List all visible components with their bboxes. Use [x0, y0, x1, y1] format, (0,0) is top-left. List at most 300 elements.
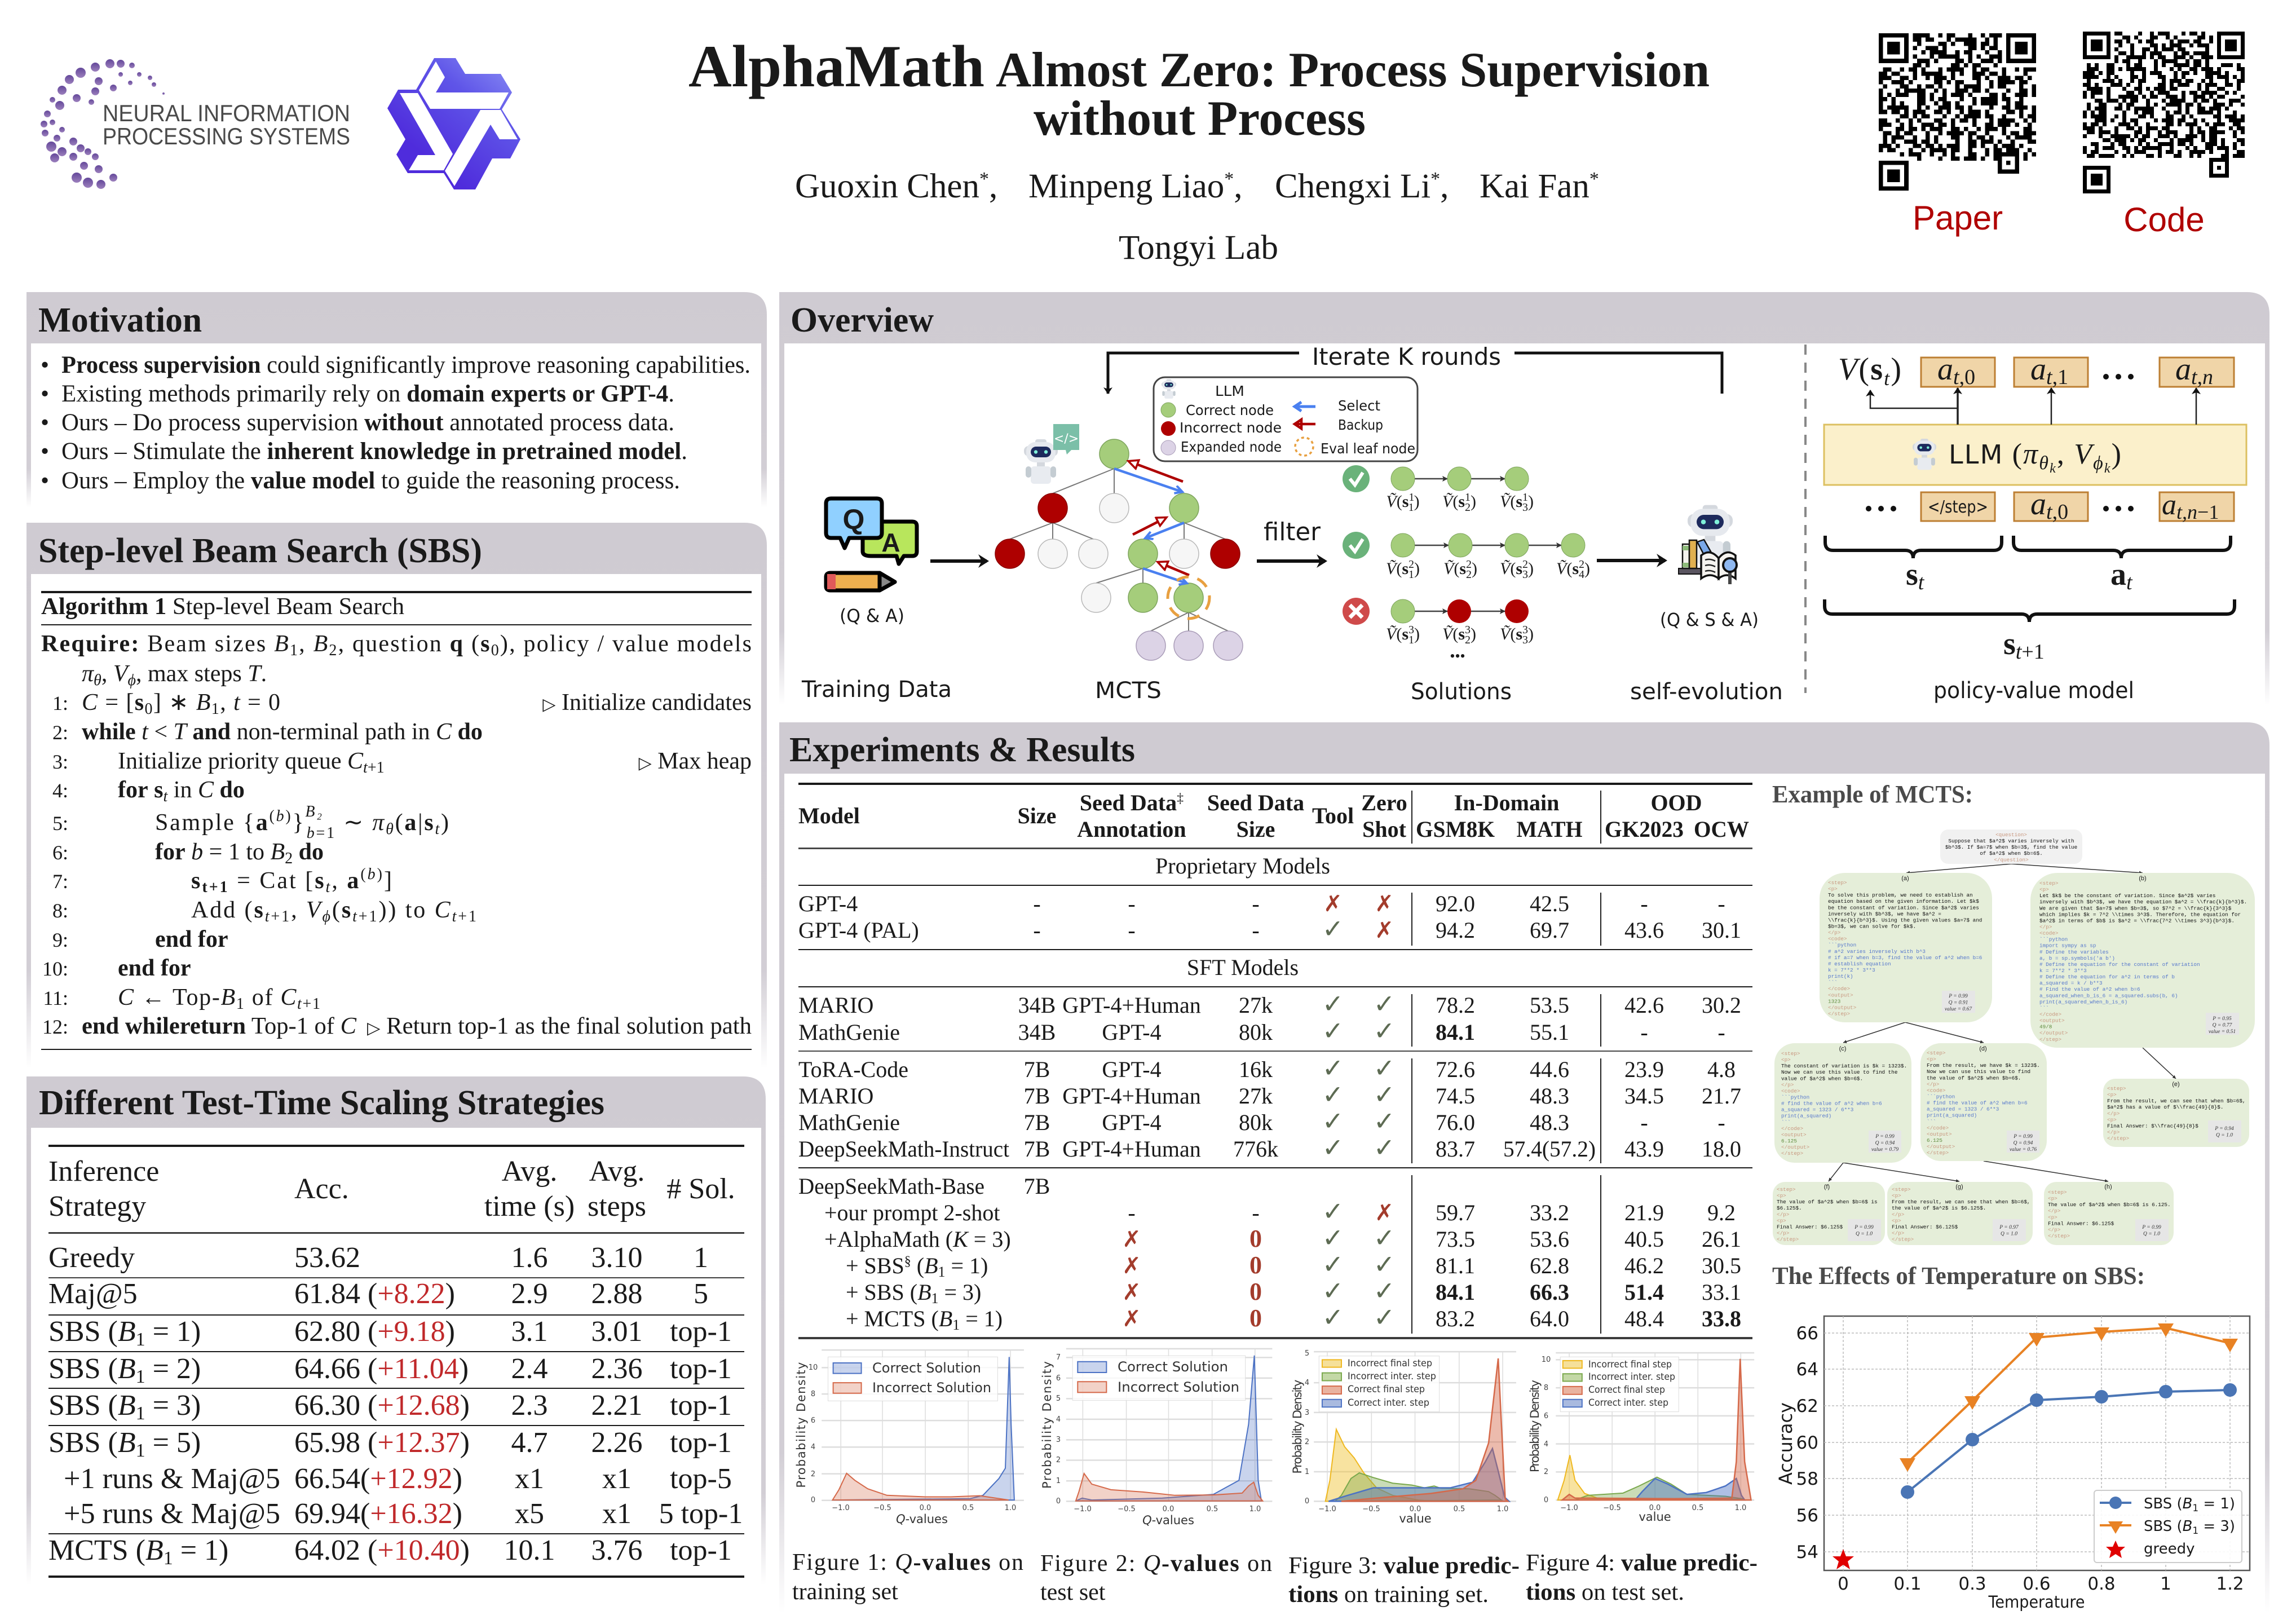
algorithm: V [113, 661, 130, 687]
llm robot [1913, 439, 1936, 470]
incorrect solution row 3: 3 [1408, 624, 1414, 636]
rows: deepseekmath base and alphamath: 59.7 [1436, 1200, 1475, 1225]
figure 3 chart: 0.0 [1410, 1505, 1421, 1513]
rows: sft models 34b: 78.2 [1436, 992, 1475, 1018]
table header: Size [1018, 803, 1056, 828]
node f: </step> [1777, 1237, 1799, 1243]
algorithm: 9: [52, 929, 68, 951]
incorrect solution row 3: Ṽ(s [1386, 625, 1408, 643]
algorithm: ϕ [127, 672, 136, 689]
rows: deepseekmath base and alphamath: § [904, 1254, 911, 1269]
node b: P = 0.95 [2212, 1016, 2232, 1022]
policy-value model diagram: t,0 [1953, 365, 1975, 389]
rows: deepseekmath base and alphamath: = 3) [938, 1279, 981, 1305]
rows: deepseekmath base and alphamath: 62.8 [1530, 1253, 1569, 1278]
label: q s a: (Q & S & A) [1660, 609, 1759, 630]
rows: sft models 7b: GPT-4 [1102, 1057, 1162, 1082]
figure 1 chart: Incorrect Solution [872, 1380, 991, 1396]
x axis ticks: 0.3 [1958, 1574, 1986, 1594]
rows: deepseekmath base and alphamath: + SBS [846, 1253, 904, 1278]
rows: sft models 7b: 18.0 [1702, 1136, 1741, 1162]
algorithm: ] ∗ [153, 690, 195, 716]
node a: k = 7**2 * 3**3 [1828, 967, 1875, 973]
rows: sft models 34b: MathGenie [798, 1020, 900, 1045]
algorithm: C = [s [82, 690, 144, 716]
node c: P = 0.99 [1875, 1134, 1895, 1140]
node c: value = 0.79 [1871, 1147, 1898, 1153]
node c: </p> [1781, 1082, 1794, 1088]
algorithm: b [307, 824, 315, 842]
stage labels: Training Data [801, 677, 952, 703]
state labels: t [1918, 571, 1925, 594]
node g: </p> [1892, 1211, 1905, 1217]
llm label: V [2074, 438, 2095, 470]
legend: Eval leaf node [1321, 440, 1415, 457]
algorithm: B [314, 631, 328, 657]
node b: # Find the value of a^2 when b=6 [2039, 986, 2140, 992]
node a: To solve this problem, we need to establish an [1828, 892, 1973, 898]
node e: </p> [2107, 1129, 2120, 1135]
node a: # if a=7 when b=3, find the value of a^2 when b=6 [1828, 955, 1982, 961]
rows: sft models 34b: 34B [1018, 992, 1056, 1018]
node c: a_squared = 1323 / 6**3 [1781, 1107, 1853, 1113]
qr code: paper [1874, 33, 2041, 191]
figure 4 chart: 0.5 [1692, 1504, 1703, 1512]
algorithm: C ← Top-B [118, 985, 235, 1010]
correct solution row 2: 1 [1408, 568, 1414, 581]
strategies table: Greedy [48, 1242, 135, 1274]
node e: P = 0.94 [2214, 1126, 2234, 1132]
rows: deepseekmath base and alphamath: 33.1 [1702, 1279, 1741, 1305]
node a: # a^2 varies inversely with b^3 [1828, 948, 1926, 955]
rows: sft models 34b: 34B [1018, 1020, 1056, 1045]
rows: sft models 34b: - [1640, 1020, 1648, 1045]
figure 2 chart: 0.5 [1207, 1505, 1218, 1513]
algorithm: B₂ [305, 803, 322, 820]
figure 2 chart: −1.0 [1074, 1505, 1092, 1513]
incorrect solution row 3: 3 [1522, 624, 1528, 636]
algorithm: Sample {a [155, 810, 268, 836]
strategies table: 3.10 [591, 1242, 643, 1274]
legend: LLM [1215, 383, 1244, 399]
table header [798, 790, 1749, 842]
rows: deepseekmath base and alphamath: ✓ [1374, 1276, 1395, 1306]
rows: sft models 7b: 7B [1024, 1083, 1050, 1109]
correct solution row 1: ) [1471, 492, 1476, 511]
algorithm: t [326, 879, 331, 896]
rows: deepseekmath base and alphamath: - [1128, 1200, 1136, 1225]
figure 1 chart: 4 [811, 1443, 815, 1451]
x axis ticks: 1 [2160, 1574, 2171, 1594]
strategies table: +1 runs & Maj@5 [64, 1463, 280, 1495]
algorithm: 5: [52, 812, 68, 835]
algorithm: 8: [52, 899, 68, 922]
strategies table: 2.9 [511, 1278, 548, 1310]
node g [1887, 1182, 2033, 1245]
stage labels: policy-value model [1933, 678, 2134, 704]
rows: deepseekmath base and alphamath: ✗ [1122, 1253, 1141, 1279]
node g: <p> [1892, 1193, 1901, 1199]
icon: question and answer bubbles: Q [843, 504, 864, 535]
series: sbs b1 equals 1 [1901, 1383, 2237, 1499]
axis titles [1775, 1402, 2085, 1612]
correct solution row 1: 1 [1465, 491, 1471, 504]
incorrect solution row 3: 1 [1408, 634, 1414, 646]
authors: * [1430, 169, 1440, 189]
node f: <p> [1777, 1193, 1786, 1199]
filter label and arrow: filter [1264, 518, 1321, 546]
table header: In-Domain [1454, 790, 1559, 815]
strategies table: x5 [515, 1498, 544, 1530]
ellipsis dots [1866, 374, 2134, 511]
figure 3 chart: 5 [1305, 1349, 1309, 1358]
results table: Proprietary Models [1155, 853, 1330, 879]
algorithm: , [299, 631, 305, 657]
rows: deepseekmath base and alphamath: ✗ [1375, 1200, 1394, 1226]
authors: Minpeng Liao [1028, 167, 1224, 205]
rows: sft models 7b: 27k [1239, 1083, 1273, 1109]
motivation bullets: • [41, 467, 49, 494]
rows: deepseekmath base and alphamath: 64.0 [1530, 1306, 1569, 1331]
node b: </p> [2039, 924, 2052, 930]
table header: Seed Data [1080, 790, 1177, 815]
iterate k rounds loop [1108, 343, 1722, 394]
node d: the value of $a^2$ when $b=6$. [1927, 1075, 2021, 1081]
authors: , [1440, 167, 1449, 205]
rows: deepseekmath base and alphamath: + SBS (B [846, 1279, 931, 1305]
figure 4 chart: Incorrect inter. step [1588, 1371, 1675, 1383]
correct solution row 2: Ṽ(s [1386, 559, 1408, 578]
figure captions: Figure 3: value predic- [1288, 1553, 1520, 1579]
figure 3 chart: −1.0 [1318, 1505, 1336, 1513]
node b: print(a_squared_when_b_is_6) [2039, 999, 2127, 1005]
rows: proprietary models: 69.7 [1530, 917, 1569, 943]
motivation bullets: Ours – Stimulate the inherent knowledge in pretrained model. [61, 438, 687, 465]
figure 4 chart: Correct final step [1588, 1384, 1665, 1396]
rows: deepseekmath base and alphamath: 66.3 [1530, 1279, 1569, 1305]
rows: sft models 7b: MathGenie [798, 1110, 900, 1135]
rows: proprietary models: 30.1 [1702, 917, 1741, 943]
node c: </step> [1781, 1150, 1803, 1157]
y axis ticks: 62 [1796, 1396, 1818, 1416]
policy-value model diagram: a [2030, 352, 2046, 387]
rows: sft models 7b: 7B [1024, 1057, 1050, 1082]
algorithm: 2 [285, 850, 293, 867]
authors [795, 167, 1599, 205]
node a: Q = 0.91 [1949, 1000, 1968, 1006]
figure 1 chart [794, 1350, 1024, 1526]
greedy marker [1833, 1549, 1854, 1569]
strategies table: top-1 [670, 1353, 732, 1385]
node f: Q = 1.0 [1856, 1232, 1873, 1237]
rows: sft models 7b: - [1717, 1110, 1725, 1135]
algorithm: = Cat [ [229, 868, 313, 894]
node a: </code> [1828, 986, 1850, 992]
node e [2103, 1079, 2249, 1147]
node b: ``` [2039, 1005, 2049, 1011]
node f: P = 0.99 [1854, 1225, 1874, 1230]
arrow: training data to mcts [930, 559, 987, 563]
rows: proprietary models: - [1252, 891, 1260, 916]
algorithm: θ [386, 820, 394, 838]
algorithm: 1 [211, 700, 219, 718]
rows: deepseekmath base and alphamath: 51.4 [1624, 1279, 1664, 1305]
figure 3 chart: 2 [1305, 1438, 1309, 1446]
stage labels: self-evolution [1630, 679, 1783, 705]
algorithm: t [352, 908, 357, 925]
rows: sft models 7b: GPT-4+Human [1062, 1083, 1201, 1109]
authors: , [989, 167, 997, 205]
rows: sft models 34b: 27k [1239, 992, 1273, 1018]
rows: sft models 7b: ✓ [1374, 1053, 1395, 1083]
rows: deepseekmath base and alphamath: 81.1 [1436, 1253, 1475, 1278]
logo: neural information processing systems: NEURAL INFORMATION [103, 100, 350, 126]
strategies table: = 1) [173, 1534, 228, 1566]
strategies table: 2.3 [511, 1389, 548, 1422]
rows: proprietary models: 43.6 [1624, 917, 1664, 943]
node b: which implies $k = 7^2 \\times 3^3$. Therefore, the equation for [2039, 911, 2241, 917]
algorithm: ϕ [322, 908, 330, 925]
algorithm: 2: [52, 721, 68, 744]
x axis ticks [1838, 1574, 2244, 1594]
icon: question and answer bubbles [826, 498, 917, 590]
algorithm: V [306, 897, 323, 923]
rows: sft models 7b: 44.6 [1530, 1057, 1569, 1082]
llm label: k [2104, 461, 2110, 476]
strategies table: top-1 [670, 1534, 732, 1566]
node c: 6.125 [1781, 1138, 1797, 1144]
node b: ```python [2039, 937, 2068, 943]
rows: deepseekmath base and alphamath: ✓ [1374, 1223, 1395, 1253]
rows: proprietary models: - [1640, 891, 1648, 916]
strategies table: Avg. [502, 1155, 557, 1188]
figure 2 chart: 7 [1056, 1353, 1061, 1362]
figure 1 chart: 2 [811, 1470, 815, 1479]
node c: <step> [1781, 1051, 1800, 1057]
algorithm: 4: [52, 779, 68, 802]
correct solution row 1: 1 [1408, 491, 1414, 504]
figure captions: tions on training set. [1288, 1582, 1489, 1608]
algorithm: 3: [52, 751, 68, 773]
incorrect solution row 3: 3 [1465, 624, 1471, 636]
algorithm: +1 [368, 759, 385, 776]
node b [2030, 873, 2255, 1048]
panel: test-time scaling strategies [27, 1076, 766, 1590]
question node: </question> [1994, 857, 2029, 863]
tree connectors [1829, 864, 2176, 1181]
node e: (e) [2172, 1081, 2180, 1088]
correct solution row 1: ) [1528, 492, 1534, 511]
value output: ) [1891, 352, 1901, 387]
rows: deepseekmath base and alphamath: ✓ [1374, 1249, 1395, 1279]
robot with code bubble [1024, 424, 1079, 484]
rows: sft models 7b: 16k [1239, 1057, 1273, 1082]
rows: deepseekmath base and alphamath: 1 [931, 1290, 938, 1307]
node b: import sympy as sp [2039, 943, 2096, 949]
motivation bullets: • [41, 409, 49, 436]
state labels: t [2126, 571, 2133, 594]
figure 4 chart: 1.0 [1735, 1504, 1746, 1512]
node g: <step> [1892, 1186, 1911, 1193]
rows: proprietary models: - [1033, 917, 1041, 943]
correct solution row 2: 2 [1408, 558, 1414, 571]
node h: </p> [2048, 1208, 2061, 1214]
rows: sft models 34b: ✓ [1374, 1016, 1395, 1046]
strategies table: = 1) [145, 1316, 201, 1348]
table header: Tool [1312, 803, 1354, 828]
correct solution row 1: 1 [1408, 501, 1414, 514]
algorithm: C do [198, 777, 245, 803]
legend: Correct node [1186, 402, 1274, 418]
figure captions: test set [1040, 1579, 1106, 1605]
node b: # Define the variables [2039, 949, 2109, 955]
algorithm: } [292, 810, 304, 836]
node g: Q = 1.0 [2001, 1232, 2017, 1237]
correct solution row 2: 2 [1466, 558, 1472, 571]
figure 2 chart: Incorrect Solution [1118, 1379, 1239, 1395]
rows: sft models 7b: 48.3 [1530, 1083, 1569, 1109]
rows: deepseekmath base and alphamath: 33.2 [1530, 1200, 1569, 1225]
node b: a, b = sp.symbols('a b') [2039, 955, 2115, 961]
figure captions: training set [792, 1579, 898, 1605]
node f: </p> [1777, 1211, 1790, 1217]
node b: a_squared_when_b_is_6 = a_squared.subs(b, 6) [2039, 992, 2178, 999]
figure 1 chart: 10 [809, 1363, 818, 1372]
algorithm: s [315, 868, 324, 894]
rows: sft models 7b: 23.9 [1624, 1057, 1664, 1082]
node b: k = 7**2 * 3**3 [2039, 968, 2087, 974]
algorithm: , [136, 661, 142, 687]
algorithm: ∼ [336, 810, 371, 836]
rows: sft models 7b: GPT-4+Human [1062, 1136, 1201, 1162]
question node: of $a^2$ when $b=6$. [1980, 850, 2043, 857]
rows: proprietary models: - [1128, 917, 1136, 943]
node c: </output> [1781, 1144, 1810, 1150]
node c: <p> [1781, 1057, 1791, 1063]
algorithm: B [196, 690, 210, 716]
node a: <p> [1828, 886, 1838, 892]
correct solution row 2: Ṽ(s [1443, 559, 1466, 578]
algorithm: 6: [52, 841, 68, 864]
rows: proprietary models: 42.5 [1530, 891, 1569, 916]
strategies table: 5 top-1 [659, 1498, 743, 1530]
figure 4 chart: 0 [1544, 1496, 1548, 1504]
node d: <step> [1927, 1050, 1946, 1056]
results table [798, 783, 1752, 1339]
correct solution row 2: 2 [1522, 558, 1528, 571]
node a: </p> [1828, 930, 1841, 936]
figure 2 chart: 4 [1056, 1415, 1061, 1424]
authors: Chengxi Li [1275, 167, 1430, 205]
llm label: ) [2112, 438, 2121, 470]
table header: GSM8K [1416, 817, 1495, 842]
rows: sft models 7b: GPT-4 [1102, 1110, 1162, 1135]
rows: sft models 34b: GPT-4 [1102, 1020, 1162, 1045]
algorithm: , [332, 868, 345, 894]
node g: Final Answer: $6.125$ [1892, 1224, 1958, 1230]
rows: deepseekmath base and alphamath: 84.1 [1436, 1279, 1475, 1305]
algorithm: for b = 1 to B [155, 839, 285, 865]
strategies table: 2.4 [511, 1353, 548, 1385]
iterate k rounds loop: Iterate K rounds [1312, 343, 1501, 370]
rows: sft models 7b: DeepSeekMath-Instruct [798, 1136, 1009, 1162]
y axis ticks: 64 [1796, 1360, 1818, 1380]
motivation bullets: • [41, 381, 49, 407]
rows: sft models 7b: 34.5 [1624, 1083, 1664, 1109]
strategies table: 66.30 (+12.68) [294, 1389, 470, 1422]
figure 4 chart: −0.5 [1603, 1504, 1621, 1512]
tree edges [1010, 469, 1228, 631]
node d: </code> [1927, 1125, 1949, 1131]
node g: P = 0.97 [1999, 1225, 2019, 1230]
correct solution row 2: ) [1472, 559, 1477, 578]
node a: print(k) [1828, 973, 1853, 979]
node h: <step> [2048, 1189, 2067, 1195]
rows: deepseekmath base and alphamath: 46.2 [1624, 1253, 1664, 1278]
node b: <step> [2039, 880, 2059, 886]
algorithm: Require: Beam sizes B [41, 631, 289, 657]
strategies table: SBS (B [48, 1316, 136, 1348]
node a: <output> [1828, 992, 1853, 998]
rows: sft models 7b: 7B [1024, 1136, 1050, 1162]
rows: deepseekmath base and alphamath: +AlphaMath (K = 3) [824, 1226, 1011, 1252]
figure 3 chart: Correct final step [1348, 1384, 1425, 1395]
incorrect solution row 3: 2 [1465, 634, 1471, 646]
rows: sft models 34b: - [1717, 1020, 1725, 1045]
figure 3 chart [1291, 1349, 1516, 1525]
node d: <p> [1927, 1056, 1936, 1062]
filter label and arrow [1257, 518, 1325, 561]
strategies table: 64.66 (+11.04) [294, 1353, 469, 1385]
algorithm: 11: [43, 987, 68, 1009]
algorithm: ), [500, 631, 515, 657]
node d: # find the value of a^2 when b=6 [1927, 1100, 2028, 1106]
robot with code bubble: </> [1054, 432, 1079, 446]
node c: </code> [1781, 1126, 1803, 1132]
node a: </output> [1828, 1004, 1857, 1010]
algorithm: ▷ Return top-1 as the final solution path [367, 1013, 752, 1039]
rows: sft models 7b: ✓ [1322, 1132, 1344, 1163]
strategies table: x1 [602, 1463, 632, 1495]
correct solution row 2: Ṽ(s [1500, 559, 1522, 578]
figure 4 chart: 8 [1544, 1384, 1548, 1392]
rows: sft models 34b: 53.5 [1530, 992, 1569, 1018]
rows: deepseekmath base and alphamath: 1 [952, 1317, 960, 1333]
figure 2 chart [1040, 1349, 1272, 1527]
algorithm: 1 [290, 642, 298, 659]
subheading: example of mcts: Example of MCTS: [1772, 780, 1973, 808]
table header: ‡ [1177, 791, 1184, 806]
node h: (h) [2104, 1184, 2112, 1190]
algorithm: )) to [378, 897, 433, 923]
rows: sft models 7b: ✓ [1374, 1079, 1395, 1110]
policy-value model diagram: </step> [1928, 497, 1988, 517]
node e: <p> [2107, 1116, 2117, 1123]
rows: sft models 7b: 72.6 [1436, 1057, 1475, 1082]
evaluated leaf ring [1168, 577, 1209, 619]
llm label: k [2050, 461, 2056, 476]
strategies table: x1 [602, 1498, 632, 1530]
state labels: +1 [2021, 640, 2045, 664]
state labels: t [2016, 640, 2023, 664]
strategies table: MCTS (B [48, 1534, 164, 1566]
icon: question and answer bubbles: A [881, 528, 900, 557]
figure 4 chart: value [1639, 1510, 1671, 1524]
rows: deepseekmath base and alphamath: 73.5 [1436, 1226, 1475, 1252]
rows: deepseekmath base and alphamath: 83.2 [1436, 1306, 1475, 1331]
x axis ticks: 0 [1838, 1574, 1849, 1594]
figure 2 chart: 1.0 [1249, 1505, 1261, 1513]
